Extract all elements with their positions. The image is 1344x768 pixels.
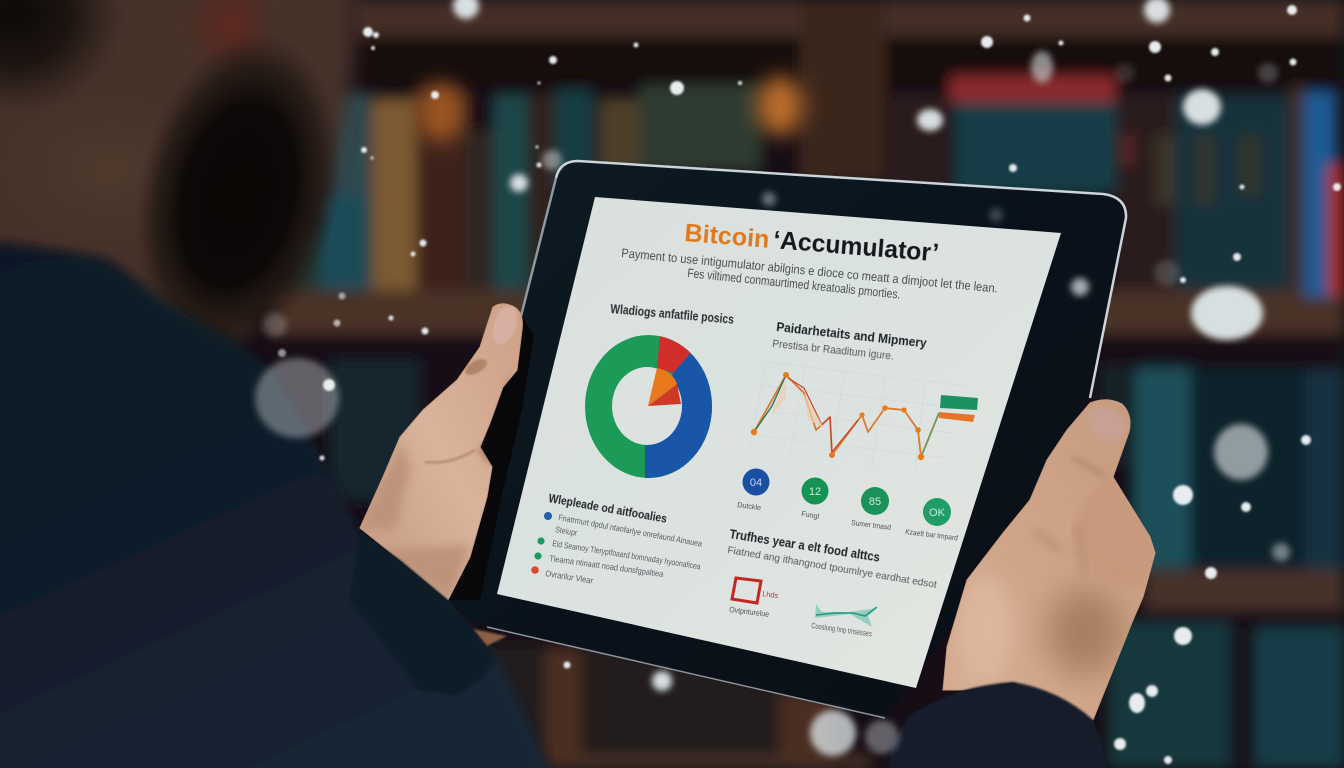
heading: donut section: Wladiogs anfatfile posics [610,302,735,327]
tablet: body and bezel [448,161,1126,719]
title [684,219,940,267]
icon: teal mini chart [811,604,877,638]
lower right description: Fiatned ang ithangnod tpoumlrye eardhat edsot [727,544,938,591]
line chart subtitle: Prestisa br Raaditum igure. [772,338,894,363]
metric circle: green 85: 85 [869,496,881,508]
icon: red frame [729,578,779,619]
bullet list: Ovrarilur Vlear [545,568,594,586]
subtitle text: Fes viltimed conmaurtimed kreatoalis pmorties. [687,266,901,302]
line chart [749,362,978,470]
metric labels [737,500,958,542]
bullet list: Fnatrmurt dpdul ntanfarlye onrefaund Ainauea [558,512,703,549]
metric circle: blue [742,468,770,496]
heading: lower right section: Trufhes year a elt food alttcs [729,527,881,565]
subtitle text: Payment to use intigumulator abilgins e dioce co meatt a dimjoot let the lean. [621,246,998,296]
icon: red frame: Ovtpnturelue [729,605,770,619]
metric labels: Kzaeft bar tmpard [905,527,958,542]
metric circle: teal [923,498,951,526]
person: navy sweater [0,243,555,768]
title: ‘Accumulator’ [772,226,940,267]
title: Bitcoin [684,219,770,254]
person: head and beard [0,0,370,377]
metric circle: blue: 04 [750,477,762,489]
metric circle: green 12: 12 [809,486,821,498]
heading: bullet list: Wlepleade od aitfooalies [547,491,668,526]
metric labels: Sumer tmasd [851,518,892,532]
left hand holding tablet [360,303,522,646]
bullet list: Tlearna ntinaatt noad dunsfgpaltiea [549,553,664,579]
right hand holding tablet [943,400,1155,720]
lamps: warm orange lights on shelf [417,76,804,142]
tablet: grip shadow behind thumb [448,316,534,600]
heading: line chart section: Paidarhetaits and Mipmery [776,320,927,351]
metric labels: Fungl [801,509,820,521]
left hand fingertip under tablet [473,629,507,646]
left sleeve cuff [350,532,495,695]
donut chart [585,335,712,478]
right sleeve cuff [888,682,1107,768]
bullet list [531,512,703,586]
tablet: light screen [497,197,1061,688]
icon: teal mini chart: Cooslung hnp tmsesses [811,621,872,638]
falling snow: blurred flakes [255,0,1290,756]
falling snow: small flakes [278,5,1341,764]
metric labels: Dutckle [737,500,762,512]
bullet list: Steiupr [555,524,578,538]
icon: red frame: Lhds [762,589,779,600]
metric circle: green 12 [802,478,828,504]
metric circle: green 85 [861,487,889,515]
metric circle: teal: OK [929,507,946,519]
bullet list: Eld Seamoy Tleryptfoaard bomnaday hyoonaficea [552,538,702,571]
